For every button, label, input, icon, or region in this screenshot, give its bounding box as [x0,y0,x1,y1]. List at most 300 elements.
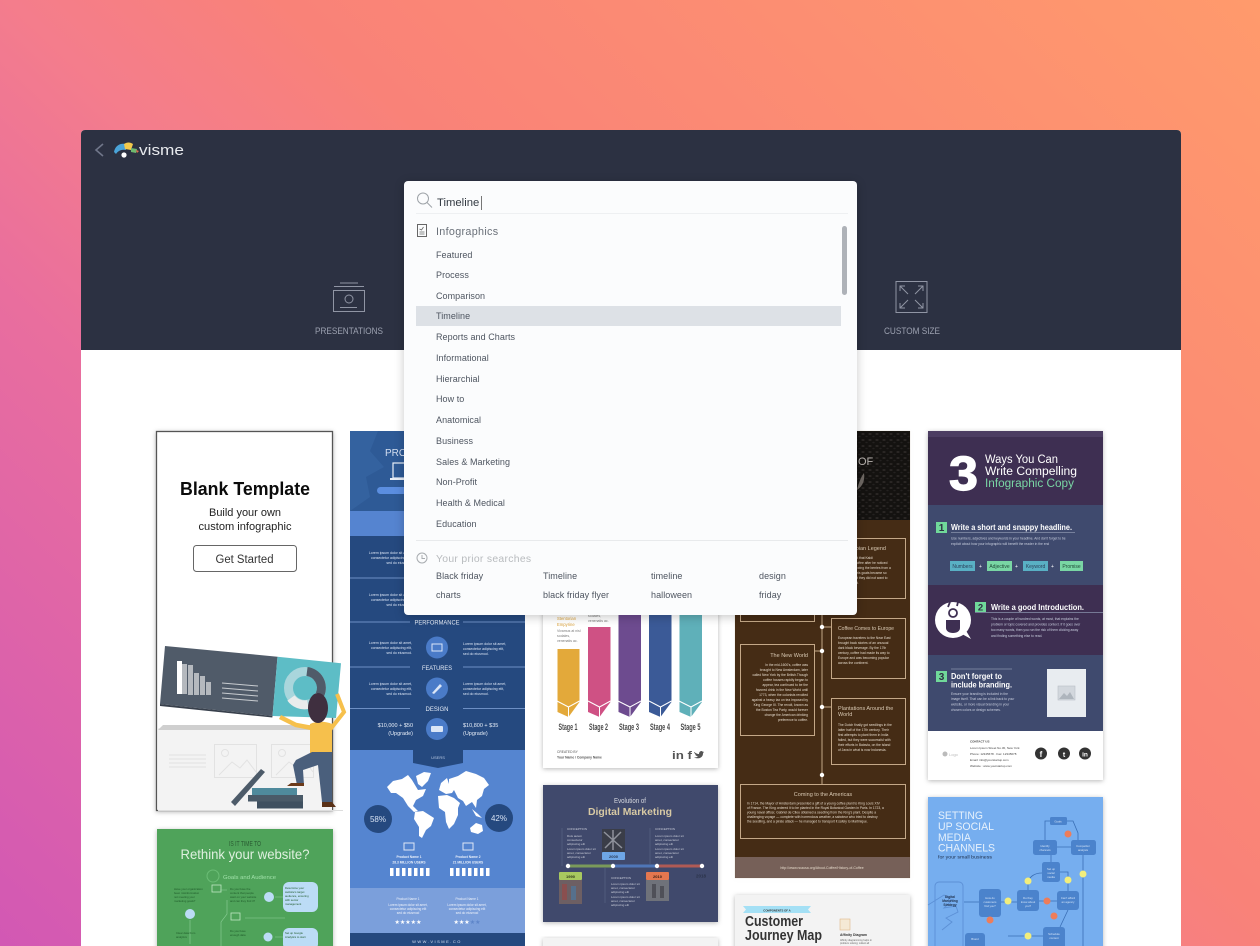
timeline notes [567,827,684,907]
card: blank template [156,432,344,810]
application window [81,130,1181,946]
box: coffee comes to europe: brought back stories of an unusual [838,641,889,645]
flowchart: Can't afford [1061,896,1076,900]
stage labels: Stage 1 [558,722,578,732]
label: custom size: CUSTOM SIZE [884,326,940,336]
icon: search [417,192,432,208]
box: partially hidden left box [740,615,815,622]
scrollbar [842,226,847,295]
box: plantations around the world: Plantations Around the [838,706,893,712]
world map [387,771,489,838]
section 1: Promise [1062,564,1081,570]
green card titles: Rethink your website? [180,846,310,862]
lorem rows: sed do eiusmod. [386,561,412,565]
affinity diagram: Affinity Diagram [840,933,867,937]
product users: Product Name 2 [455,855,481,859]
card: blue product comparison: consectetur adipiscing elit, [463,647,504,651]
stage labels: Stage 4 [650,722,670,732]
timeline notes: CONCEPTION [567,827,587,831]
flow elements: Analytics to start [285,935,306,939]
lorem rows: consectetur adipiscing elit, [371,687,412,691]
stage descriptions: Vivamus at nisl [557,629,581,633]
customer journey title: Customer [745,914,803,930]
prior search terms: halloween [651,590,692,600]
prior search terms: Timeline [543,570,577,580]
box: coming to the americas: In 1714, the Mayor of Amsterdam presented a gift of a young coffee plant to King Louis XIV [747,802,881,806]
prior search terms: friday [759,590,781,600]
contact footer: f [1040,750,1043,759]
category list: Hierarchial [436,374,480,384]
box: the new world [740,644,814,736]
section 1: Use numbers, adjectives and keywords in your headline. And don't forget to be [951,536,1066,540]
timeline notes: adipiscing elit [611,890,629,894]
timeline notes: Lorem ipsum dolor sit [567,847,596,851]
category list: Education [436,518,477,528]
box: coming to the americas: of France. The King ordered it to be planted in the Royal Botanical Garden in Paris. In 1723, a [747,806,884,810]
timeline milestones: 2000 [609,854,619,859]
pricing: $10,800 + $35 [463,723,498,729]
users pentagon [413,750,463,768]
social media title: MEDIA [938,832,972,844]
credits: Your Name / Company Name [557,756,602,760]
section 3: chosen colors or design schemes. [951,708,1001,712]
card: partial card below digital marketing [543,938,718,946]
box: coffee comes to europe: dark black beverage. By the 17th [838,646,886,650]
flow elements: content that people [230,891,254,895]
stage labels [558,722,700,732]
social media title [938,810,995,854]
flowchart: customers [984,900,997,904]
highlighted row [416,306,841,326]
stage labels: Stage 5 [680,722,700,732]
timeline milestones: 1990 [566,874,576,879]
card: digital marketing timeline [543,785,718,922]
affinity diagram: Affinity diagramming helps in [840,939,873,942]
visme logo: visme [139,143,184,159]
lorem rows: sed do eiusmod. [386,651,412,655]
flowchart: social [1047,871,1055,875]
box: coffee comes to europe [832,618,906,678]
product ratings band: Product Name 1 [396,897,420,901]
purple header [928,431,1103,505]
flow elements: analytics [176,935,187,939]
category list: Timeline [436,311,470,321]
top bar and template thumbnails [95,142,1106,946]
box: the new world: coffee houses rapidly began to [763,678,808,682]
flow elements: not meeting your [174,895,195,899]
coffee footer [735,857,910,878]
contact footer: Website : www.yourstartup.com [970,764,1012,768]
icon: presentations [334,283,364,312]
get started button: Get Started [216,554,274,566]
card: stages chart [543,560,718,768]
contact footer: Lorem Ipsum Street No.30, New York [970,746,1020,750]
category list: How to [436,394,464,404]
card: 3 ways to write copy [928,431,1103,780]
lorem rows [369,551,412,696]
social media title: CHANNELS [938,842,995,854]
timeline notes: amet, consectetur [611,899,635,903]
pricing: $10,000 + $50 [378,723,413,729]
stage labels: Stage 3 [619,722,639,732]
flow elements [174,870,318,946]
stage descriptions: venenatis ac. [557,639,578,643]
box: ethiopian legend: certain tree, his goats became so [838,571,887,575]
section 1: + [979,564,982,570]
flowchart: Schedule [1048,932,1060,936]
section 2 [928,585,1103,655]
credits: CREATED BY [557,750,579,754]
category list: Sales & Marketing [436,456,510,466]
box: the new world: preference to coffee. [778,718,808,722]
contact footer: Logo [949,752,959,757]
section 1: Write a short and snappy headline. [951,523,1072,532]
flowchart: Brand [971,937,979,941]
contact footer: Email: info@yourstartup.com [970,758,1009,762]
category list: Informational [436,352,489,362]
box: the new world: against a heavy tax on tea imposed by [752,698,808,702]
box: ethiopian legend [857,538,906,599]
timeline notes: Lorem ipsum dolor sit [611,895,640,899]
box: coming to the americas: young naval officer, Gabriel de Clieu obtained a seedling from the King's plant. Despite a [747,810,876,814]
timeline track [566,864,704,868]
product ratings band: consectetur adipiscing elit [449,907,485,911]
flowchart: know about [1021,900,1035,904]
product ratings band: sed do eiusmod [397,911,419,915]
digital marketing title: Evolution of [614,798,646,805]
section 1: + [1015,564,1018,570]
timeline notes: amet, consectetur [655,851,679,855]
flowchart: an agency [1062,900,1075,904]
box: plantations around the world: their efforts in Batavia, on the island [838,743,891,747]
box: plantations around the world: first attempts to plant them in India [838,733,889,737]
users pentagon: USERS [431,755,445,760]
feature circles [426,636,448,740]
category list: Featured [436,250,473,260]
card: blue product comparison: consectetur adipiscing elit, [463,687,504,691]
stage descriptions: Stentorian [557,616,577,621]
section 3 [928,655,1103,731]
category list [436,250,515,528]
lorem rows: consectetur adipiscing elit, [371,646,412,650]
timeline notes: Duis autem [567,834,583,838]
flow elements: been misinformation [174,891,200,895]
card: blue product comparison: Lorem ipsum dolor sit amet, [463,642,506,646]
box: coffee comes to europe: across the continent. [838,661,869,665]
stage descriptions [557,614,609,643]
lorem rows: consectetur adipiscing elit, [371,556,412,560]
product ratings band: Lorem ipsum dolor sit amet, [447,903,487,907]
prior search terms: design [759,570,786,580]
flowchart: you? [1025,904,1031,908]
divider above prior searches [416,540,848,541]
section 2: and finding something else to read. [991,634,1042,638]
divider under search [416,213,848,214]
users section background [350,750,525,888]
timeline notes: adipiscing elit [567,855,585,859]
icon: custom size [896,282,927,312]
section 2: 2 [978,602,983,614]
category heading: Infographics [436,226,498,238]
category list: Health & Medical [436,498,505,508]
share 58% [364,805,392,833]
flow elements: Have your organization [174,887,203,891]
label: presentations: PRESENTATIONS [315,326,383,336]
affinity diagram [840,919,873,945]
section 3: Ensure your branding is included in the [951,692,1008,696]
icon: clock [416,552,428,564]
contact footer: in [1082,752,1088,758]
box: the new world: King George III. The revolt, known as [754,703,808,707]
prior searches heading: Your prior searches [436,554,531,565]
timeline notes: adipiscing elit [611,903,629,907]
contact footer: Phone: 12345678 · Fax: 12345678 [970,752,1017,756]
section 3: include branding. [951,680,1012,690]
box: plantations around the world: The Dutch finally got seedlings in the [838,723,892,727]
product users: 21 MILLION USERS [453,860,484,864]
section 3: image itself. That can be a link back to your [951,697,1015,701]
social media title: SETTING [938,810,983,822]
credits [557,750,602,760]
flow elements: and can they find it? [230,899,255,903]
timeline spine [822,615,823,784]
flow elements: enough data [230,933,246,937]
box: the new world: 1773, when the colonists revolted [759,693,808,697]
social media title: UP SOCIAL [938,821,994,833]
get started button [194,546,296,572]
card shadow: coffee [735,431,910,878]
section 2: Write a good Introduction. [991,603,1084,612]
card: customer journey map [735,895,910,946]
ribbon: COMPONENTS OF A [763,908,791,912]
lorem rows: Lorem ipsum dolor sit amet, [369,682,412,686]
product users [390,843,490,876]
prior search terms: black friday flyer [543,590,609,600]
flowchart: Digital [945,895,955,899]
digital marketing title: Digital Marketing [588,806,672,818]
box: plantations around the world: failed, but they were successful with [838,738,891,742]
box: the new world: The New World [770,653,808,659]
box: the new world: called New York by the British.Though [752,673,808,677]
section 2: too many words, then you run the risk of them clicking away [991,628,1079,632]
prior search terms: Black friday [436,570,483,580]
flowchart: analysis [1078,848,1089,852]
category list: Comparison [436,290,485,300]
big number 3: 3 [949,448,978,501]
card: history of coffee timeline [735,431,910,878]
product ratings band: consectetur adipiscing elit [390,907,426,911]
share 42% [485,804,513,832]
stage descriptions: venenatis ac. [588,619,609,623]
social media subtitle: for your small business [938,854,993,860]
timeline notes: amet, consectetur [655,838,679,842]
product users: Product Name 1 [396,855,422,859]
box: the new world: In the mid-1600's, coffee was [765,663,808,667]
pricing [378,723,498,737]
share 58%: 58% [370,815,386,824]
box: the new world: change the American drinking [765,713,808,717]
section 2: problem or topic covered and provides context. If it goes over [991,622,1081,626]
lorem rows: Lorem ipsum dolor sit amet, [369,551,412,555]
stage descriptions: sodales, [557,634,570,638]
blank template subtitle: custom infographic [198,521,292,533]
stage descriptions: Empyrine [557,622,575,627]
flowchart [928,817,1096,946]
coffee header image [857,431,910,520]
timeline milestones: 2010 [653,874,663,879]
box: coming to the americas: the seedling, and a pirate attack — he managed to transport it safely to Martinique. [747,820,868,824]
box: the new world: appear, tea continued to be the [763,683,808,687]
box: coming to the americas: challenging voyage — complete with horrendous weather, a saboteur who tried to destroy [747,815,878,819]
timeline notes: adipiscing elit [567,842,585,846]
timeline notes: Lorem ipsum dolor sit [611,882,640,886]
timeline notes: CONCEPTION [611,876,631,880]
product ratings band: Lorem ipsum dolor sit amet, [388,903,428,907]
lorem rows: sed do eiusmod. [386,692,412,696]
footer url [412,940,460,943]
timeline notes: amet, consectetur [611,886,635,890]
flowchart: channels [1039,848,1051,852]
section 1: 1 [939,523,945,534]
performance heading: PERFORMANCE [414,620,460,626]
section 1: Adjective [989,564,1010,570]
prior search terms: timeline [651,570,682,580]
product users: 28.3 MILLION USERS [392,860,426,864]
box: ethiopian legend: energetic that they did not want to [838,576,888,580]
flowchart: Set up [1047,867,1055,871]
search dialog [404,181,857,615]
card: blue product comparison: Lorem ipsum dolor sit amet, [463,682,506,686]
box: ethiopian legend: Ethiopian Legend [843,546,886,552]
card: blue product comparison: sed do eiusmod. [463,692,489,696]
product ratings band: ★★★★★ [454,919,480,926]
card: blue product comparison [350,431,525,946]
product ratings band: sed do eiusmod [456,911,478,915]
social icons: in f [672,750,692,762]
coffee header image: OF [858,456,874,468]
category list: Anatomical [436,415,481,425]
flow elements: Determine your [285,886,304,890]
section 1: Numbers [952,564,973,570]
box: ethiopian legend: sleep at night. [838,581,859,585]
flowchart: Goals [1054,820,1062,824]
copy title: Ways You Can [985,454,1058,466]
flowchart: Competitor [1076,844,1090,848]
contact footer: CONTACT US [970,740,989,744]
box: plantations around the world [832,698,906,764]
flow elements: marketing goals? [174,899,196,903]
section 1: explicit about how your infographic will benefit the reader in the end [951,542,1049,546]
product ratings band: Product Name 1 [455,897,479,901]
flowchart: media [1047,875,1055,879]
stage bars [557,600,702,718]
blue card header image [350,431,404,511]
header bar [81,130,1181,350]
flowchart: Identify [1040,844,1050,848]
box: plantations around the world: of Java in what is now Indonesia. [838,748,886,752]
box: coffee comes to europe: Coffee Comes to Europe [838,626,894,632]
timeline notes: amet, consectetur [567,851,591,855]
flow elements: Do you have the [230,887,251,891]
box: plantations around the world: latter half of the 17th century. Their [838,728,890,732]
timeline notes: adipiscing elit [655,855,673,859]
lorem rows: Lorem ipsum dolor sit amet, [369,593,412,597]
visme logo [114,142,184,159]
blank template subtitle: Build your own [209,507,281,519]
customer journey title: Journey Map [745,928,822,944]
copy title: Infographic Copy [985,478,1074,490]
timeline notes: adipiscing elit [655,842,673,846]
lorem rows: sed do eiusmod. [386,603,412,607]
box: the new world: brought to New Amsterdam, later [760,668,809,672]
box: ethiopian legend: discovered coffee after he noticed [838,561,888,565]
coffee footer: http://www.ncausa.org/About-Coffee/History-of-Coffee [780,866,864,870]
icon: infographics document [417,224,427,237]
performance heading: DESIGN [426,706,449,713]
pricing: (Upgrade) [463,731,488,737]
product ratings band [350,888,525,933]
performance heading: FEATURES [422,665,452,672]
box: the new world: favored drink in the New World until [756,688,808,692]
timeline notes: Lorem ipsum dolor sit [655,847,684,851]
card: green rethink your website [157,829,333,946]
search input text: Timeline [437,197,479,209]
flow elements: Set up Google [285,931,303,935]
section 3: Don't forget to [951,672,1002,681]
category list: Reports and Charts [436,332,515,342]
copy title: Write Compelling [985,466,1077,478]
flow elements: audience, ensuring [285,894,309,898]
section 1 [928,505,1103,585]
green card titles: IS IT TIME TO [229,841,261,848]
timeline notes: consectetur [567,838,583,842]
goals and audience heading: Goals and Audience [223,875,276,881]
flowchart: Do they [1023,896,1033,900]
product ratings band: ★★★★★ [395,919,421,926]
blank template subtitle [198,507,292,533]
box: coffee comes to europe: European travelers to the Near East [838,636,891,640]
flow elements: Clear data from [176,931,196,935]
affinity diagram: problem solving; collect all [840,942,870,945]
stage descriptions: sodales, [588,614,601,618]
timeline milestones [559,828,707,904]
social icons [672,750,704,762]
box: plantations around the world: World [838,712,852,718]
blue card header image: PRODUCT [385,448,434,459]
section 1: + [1051,564,1054,570]
blank template heading: Blank Template [180,479,310,499]
flow elements: management [285,902,302,906]
pricing: (Upgrade) [388,731,413,737]
flow elements: want on your website [230,895,257,899]
flow elements: website's target [285,890,305,894]
card: setting up social media channels [928,797,1103,946]
box: ethiopian legend: The story that that Kaldi [838,556,873,560]
timeline notes: CONCEPTION [655,827,675,831]
box: coffee comes to europe: Europe and was becoming popular [838,656,890,660]
flowchart: Marketing [942,899,958,903]
card: blue product comparison: sed do eiusmod. [463,652,489,656]
ribbon [743,906,811,913]
section 3: 3 [939,672,945,683]
illustration: person lifting a board [158,646,344,810]
contact footer: t [1063,752,1066,759]
lorem rows: consectetur adipiscing elit, [371,598,412,602]
flowchart: Strategy [943,903,957,907]
category list: Non-Profit [436,477,477,487]
category list: Business [436,436,473,446]
box: coming to the americas [740,784,906,838]
